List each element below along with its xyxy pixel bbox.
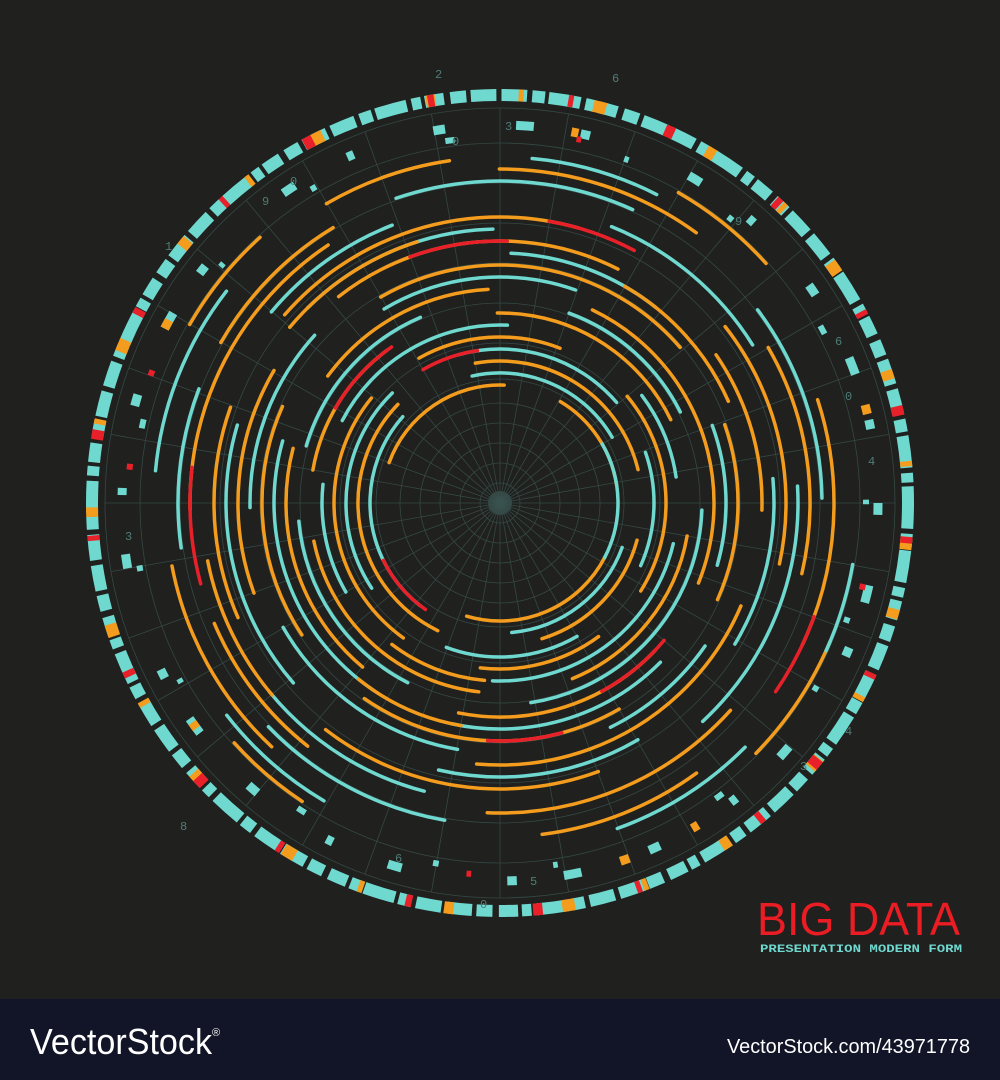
watermark footer: VectorStock (30, 1021, 213, 1062)
watermark footer: ® (212, 1027, 220, 1039)
scattered digits: 8 (180, 820, 187, 834)
scattered digits: 4 (868, 455, 875, 469)
scattered digits: 0 (452, 135, 459, 149)
scattered digits: 5 (530, 875, 537, 889)
scattered digits: 9 (262, 195, 269, 209)
scattered digits: 3 (125, 530, 132, 544)
scattered digits: 6 (612, 72, 619, 86)
scattered digits: 6 (835, 335, 842, 349)
watermark footer: VectorStock.com/43971778 (727, 1036, 970, 1058)
watermark footer (0, 999, 1000, 1080)
scattered digits: 3 (800, 760, 807, 774)
scattered digits: 2 (435, 68, 442, 82)
scattered digits: 4 (845, 725, 852, 739)
scattered digits: 3 (505, 120, 512, 134)
center glow (488, 491, 512, 515)
scattered digits: 0 (480, 898, 487, 912)
scattered digits: 6 (395, 852, 402, 866)
scattered digits: 9 (735, 215, 742, 229)
scattered digits: 1 (165, 240, 172, 254)
scattered digits (125, 68, 875, 912)
scattered digits: 0 (845, 390, 852, 404)
scattered digits: 0 (290, 175, 297, 189)
subtitle: PRESENTATION MODERN FORM (760, 944, 962, 956)
title: BIG DATA (757, 893, 960, 945)
radial grid (105, 108, 895, 898)
